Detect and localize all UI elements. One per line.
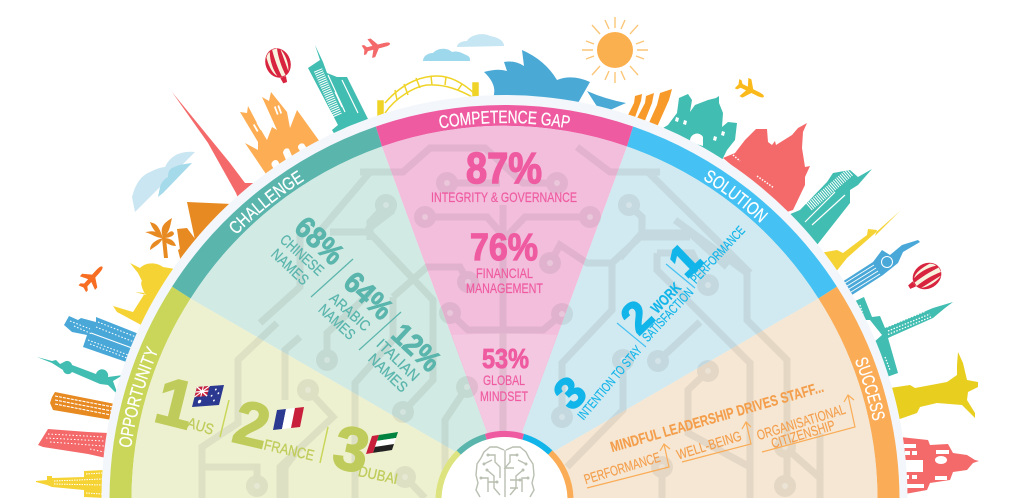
red building xyxy=(38,429,108,458)
opportunity content xyxy=(149,362,399,488)
label: competence gap: COMPETENCE GAP xyxy=(439,110,570,128)
intention to stay: INTENTION TO STAY xyxy=(574,342,645,423)
clouds left xyxy=(132,152,195,212)
success content xyxy=(582,379,855,488)
rank 1: 1 xyxy=(149,362,202,443)
divider xyxy=(220,400,229,437)
plane: yellow xyxy=(733,74,768,106)
divider xyxy=(320,427,328,463)
teal mosque xyxy=(663,94,737,160)
teal tower 1 xyxy=(308,45,368,135)
flag: france xyxy=(273,407,304,430)
semicircle rim xyxy=(102,95,908,498)
citizenship arrow: ORGANISATIONAL xyxy=(755,401,847,443)
work satisfaction xyxy=(639,279,696,345)
yellow dome xyxy=(113,263,175,326)
divider xyxy=(359,312,401,350)
burj tower xyxy=(172,92,257,198)
panel: challenge xyxy=(172,126,504,480)
yellow skyscraper xyxy=(36,470,104,498)
hub ring segments xyxy=(438,434,570,498)
performance: PERFORMANCE xyxy=(687,223,748,286)
work satisfaction: SATISFACTION xyxy=(639,285,696,345)
arabic names xyxy=(315,290,374,344)
integrity and governance: INTEGRITY & GOVERNANCE xyxy=(431,189,577,205)
financial management xyxy=(466,265,543,296)
solution content xyxy=(545,223,748,423)
christ statue xyxy=(890,352,978,420)
divider xyxy=(666,264,695,288)
hub xyxy=(438,434,570,498)
global mindset: MINDSET xyxy=(480,388,528,404)
work satisfaction: WORK xyxy=(648,279,685,317)
flag: uae xyxy=(366,432,398,454)
stat 53%: 53% xyxy=(482,343,529,374)
divider xyxy=(617,323,646,347)
financial management: FINANCIAL xyxy=(476,265,533,281)
well-being arrow: WELL-BEING xyxy=(675,428,743,462)
panel: opportunity xyxy=(110,287,504,498)
clouds top xyxy=(423,34,504,61)
panel: competence gap xyxy=(376,105,633,480)
rank 3: 3 xyxy=(327,413,375,487)
arabic names: NAMES xyxy=(315,301,359,344)
global mindset: GLOBAL xyxy=(483,372,525,388)
teal tower 2 xyxy=(788,169,872,245)
plane: orange xyxy=(75,260,110,296)
heading mindful leadership: MINDFUL LEADERSHIP DRIVES STAFF... xyxy=(609,379,826,456)
sun xyxy=(582,17,648,83)
label: success: SUCCESS xyxy=(856,357,885,420)
rank 1: 1 xyxy=(660,234,711,286)
icon: brain xyxy=(476,447,534,497)
italian names: NAMES xyxy=(364,351,411,396)
moai statues xyxy=(627,89,672,127)
orange building xyxy=(50,392,115,420)
chinese names: NAMES xyxy=(267,246,312,289)
rank 2: 2 xyxy=(612,291,663,343)
citizenship arrow: CITIZENSHIP xyxy=(769,417,837,451)
chinese names: CHINESE xyxy=(276,231,327,279)
arabic names: ARABIC xyxy=(326,290,374,335)
palm xyxy=(145,218,176,258)
rank 3: 3 xyxy=(545,367,596,419)
pyramid xyxy=(177,202,232,262)
stat 76%: 76% xyxy=(470,227,538,269)
label: opportunity: OPPORTUNITY xyxy=(119,346,158,447)
opera house xyxy=(484,50,626,110)
challenge content xyxy=(267,211,447,396)
red cathedral xyxy=(723,123,810,212)
circuit node holes xyxy=(254,180,788,489)
stat 87%: 87% xyxy=(466,144,542,193)
label FRANCE: FRANCE xyxy=(262,437,316,465)
panel: success xyxy=(504,287,900,498)
circuit pattern background xyxy=(202,147,820,498)
rank 2: 2 xyxy=(227,388,276,463)
stat 12%: 12% xyxy=(385,318,447,379)
yellow needle xyxy=(820,211,900,273)
citizenship arrow xyxy=(755,395,855,452)
financial management: MANAGEMENT xyxy=(466,280,543,296)
label DUBAI: DUBAI xyxy=(357,463,399,488)
teal skyscraper xyxy=(853,297,953,377)
label: challenge: CHALLENGE xyxy=(230,170,304,233)
label: solution: SOLUTION xyxy=(704,170,768,223)
panel: solution xyxy=(504,126,837,480)
flag: australia xyxy=(192,385,224,407)
balloon right xyxy=(903,257,946,298)
italian names: ITALIAN xyxy=(373,336,423,385)
global mindset xyxy=(480,372,528,404)
stat 68%: 68% xyxy=(288,211,350,272)
stat 64%: 64% xyxy=(337,266,399,327)
orange cathedral xyxy=(240,92,320,177)
performance arrow: PERFORMANCE xyxy=(582,449,662,487)
teal tower xyxy=(37,357,123,395)
harbour bridge xyxy=(378,76,478,116)
blue building xyxy=(64,316,139,363)
red palace xyxy=(900,437,979,494)
balloon left xyxy=(261,45,297,87)
band labels xyxy=(119,110,885,447)
competence gap content xyxy=(431,144,577,404)
big ben xyxy=(842,240,920,295)
label AUS: AUS xyxy=(185,415,216,439)
plane: red xyxy=(360,34,392,60)
divider xyxy=(311,259,353,297)
